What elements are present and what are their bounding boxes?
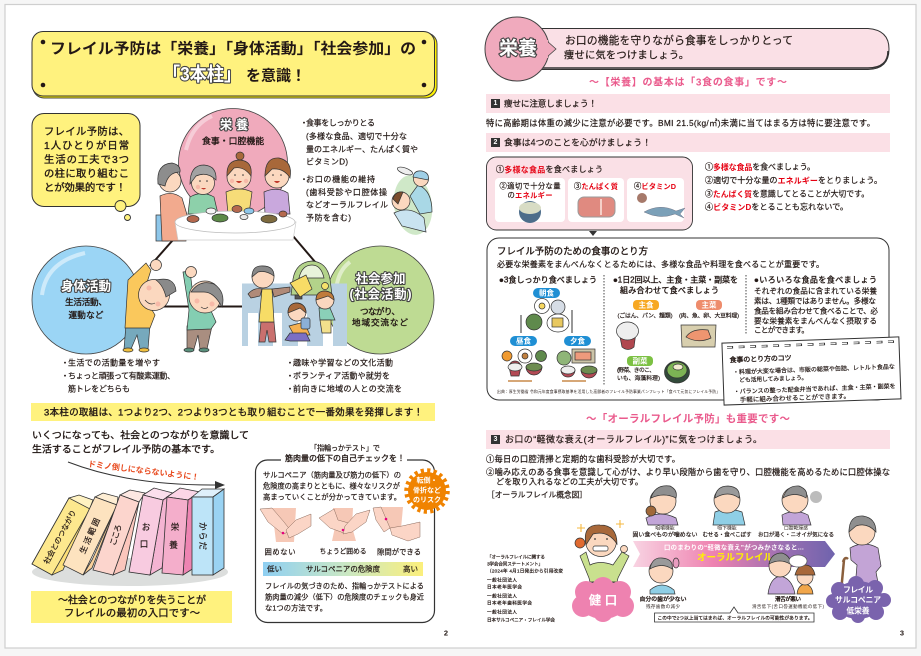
text: source statement: （2024年 4月1日発出から引用改変 xyxy=(487,568,563,574)
panel: how to eat: 素は、1種類ではありません。多様な xyxy=(754,296,876,306)
text: source statement xyxy=(487,554,563,624)
icon: risk starburst xyxy=(406,470,448,512)
circle: social participation: つながり、 xyxy=(360,306,400,316)
book: body xyxy=(192,489,224,575)
panel: ring finger test: 「指輪っかテスト」で xyxy=(310,444,380,452)
illustration: few teeth and poor articulation xyxy=(649,553,815,594)
text: BMI note: 特に高齢期は体重の減少に注意が必要です。BMI 21.5(kg/㎡)未満に当てはまる方は特に要注意です。 xyxy=(486,118,875,128)
panel: ring finger test: な1つの方法です。 xyxy=(265,604,327,612)
panel: ring finger test: 囲めない xyxy=(264,548,296,556)
tag: staple xyxy=(633,300,659,310)
text: four food points list: ④ビタミンDをとることも忘れないで。 xyxy=(705,202,848,212)
circle: nutrition xyxy=(178,108,288,218)
risk gradient bar xyxy=(263,562,423,576)
page number 3: 3 xyxy=(900,628,904,638)
text: nutrition bullets: (多様な食品、適切で十分な xyxy=(306,131,407,141)
text: social bullets: 前向きに地域の人との交流を xyxy=(293,384,402,394)
text: social bullets: ・ xyxy=(286,372,294,380)
panel: four food points: ①多様な食品を食べましょう xyxy=(496,164,603,174)
text: source statement: 日本サルコペニア・フレイル学会 xyxy=(487,616,555,624)
arrow: domino direction xyxy=(68,459,225,489)
title banner: を意識！ xyxy=(246,68,306,84)
book: social connection: 社会とのつながり xyxy=(41,508,78,566)
illustration: can't encircle xyxy=(260,508,311,542)
arrow: oral frailty xyxy=(633,541,835,567)
band 1: watch weight loss xyxy=(486,94,890,113)
text: lower captions: 自分の歯が少ない xyxy=(640,595,687,603)
illustration: healthy person xyxy=(575,520,629,590)
illustration: people eating at table xyxy=(156,152,296,241)
arrow: oral frailty: オーラルフレイル xyxy=(697,552,773,564)
text: nutrition bullets xyxy=(300,118,418,222)
illustration: people exercising xyxy=(123,260,223,352)
text: social connection intro: いくつになっても、社会とのつながりを意識して xyxy=(32,428,249,442)
text: activity bullets: ・ xyxy=(61,358,69,368)
book: mind xyxy=(93,490,145,575)
panel: meal tips note: ・料理が大変な場合は、市販の総菜や缶詰、レトルト食品な xyxy=(733,363,895,376)
panel: how to eat: 食品を組み合わせて食べることで、必 xyxy=(754,306,878,316)
card: energy xyxy=(495,178,565,223)
text: activity bullets xyxy=(61,358,175,394)
circle: social participation: (社会活動) xyxy=(350,286,412,302)
tag: main dish xyxy=(696,300,722,310)
burst: frailty sarcopenia malnutrition: サルコペニア xyxy=(835,596,881,604)
illustration: breakfast xyxy=(521,298,572,333)
text: oral care advice: ［オーラルフレイル概念図］ xyxy=(487,490,587,500)
tag: side dish xyxy=(627,356,653,366)
arrow: oral frailty: 口のまわりの“軽微な衰え”がつみかさなると… xyxy=(664,542,804,552)
card: energy: ②適切で十分な量 xyxy=(500,182,560,190)
panel: how to eat: (野菜、きのこ、 xyxy=(617,366,655,374)
note box: two or more applies xyxy=(654,607,814,622)
text: source statement: 日本老年医学会 xyxy=(487,584,522,590)
illustration: dinner xyxy=(557,349,597,381)
burst: frailty sarcopenia malnutrition xyxy=(826,576,891,623)
text: lower captions xyxy=(640,595,825,610)
text: oral decline captions: 咀嚼機能 xyxy=(655,524,675,532)
text: nutrition bullets: 予防を含む) xyxy=(306,212,351,222)
book: body: からだ xyxy=(198,522,208,550)
text: nutrition bullets: 食事をしっかりとる xyxy=(306,118,375,128)
note box: two or more applies: この中で2つ以上当てはまれば、オーラルフレイルの可能性があります。 xyxy=(658,614,812,622)
text: lower captions: 残存歯数の減少 xyxy=(646,603,680,610)
panel: how to eat: それぞれの食品に含まれている栄養 xyxy=(754,286,877,296)
icon: risk starburst: 転倒・ xyxy=(416,476,438,484)
band 3: oral frailty xyxy=(486,430,890,449)
icon: risk starburst: 骨折など xyxy=(413,486,441,494)
text: oral decline captions: 口腔乾燥感 xyxy=(784,524,808,532)
circle: social participation xyxy=(326,246,434,354)
cloud: healthy mouth: 健 口 xyxy=(589,592,617,608)
text: oral decline captions: むせる・食べこぼす xyxy=(702,532,752,538)
illustration: gap appears xyxy=(373,507,420,541)
text: nutrition bullets: ・ xyxy=(300,175,308,184)
triangle connecting lines xyxy=(150,232,316,306)
text: four food points list: ③たんぱく質を意識してとることが大切です。 xyxy=(705,188,869,198)
risk gradient bar: サルコペニアの危険度 xyxy=(306,564,381,574)
text: oral care advice xyxy=(486,454,890,500)
tag: side dish: 副菜 xyxy=(632,356,648,366)
illustration: domino books xyxy=(32,459,228,586)
title banner: 「3本柱」 xyxy=(163,64,241,86)
title banner: フレイル予防は「栄養」「身体活動」「社会参加」の xyxy=(50,40,416,58)
panel: how to eat: ●いろいろな食品を食べましょう xyxy=(754,276,877,284)
circle: physical activity xyxy=(32,246,140,354)
book: nutrition: 栄 xyxy=(171,522,180,532)
text: social bullets xyxy=(286,358,402,394)
illustration: grilled salmon xyxy=(681,325,716,347)
band 1: watch weight loss: 痩せに注意しましょう！ xyxy=(504,98,597,108)
illustration: lunch xyxy=(502,349,546,381)
cloud: healthy mouth xyxy=(572,577,634,622)
book: living range: 生活範囲 xyxy=(77,516,102,555)
band 2: four things for meals xyxy=(486,133,890,152)
book: mouth xyxy=(129,488,173,575)
card: vitamin D: ④ビタミンD xyxy=(634,182,676,190)
panel: how to eat xyxy=(487,238,889,400)
text: oral decline captions: お口が渇く・ニオイが気になる xyxy=(758,530,834,538)
illustration: dentist xyxy=(390,165,436,237)
tag: dinner: 夕食 xyxy=(570,336,585,346)
circle: nutrition: 栄 養 xyxy=(220,117,249,132)
risk gradient bar: 高い xyxy=(403,564,418,574)
circle: social participation: 社会参加 xyxy=(356,271,406,286)
book: nutrition xyxy=(162,488,200,575)
panel: ring finger test: フレイルの気づきのため、指輪っかテストによる xyxy=(265,582,424,590)
illustration: crosswalk with guard and children xyxy=(242,261,347,346)
text: social bullets: ・ xyxy=(286,384,294,394)
illustration: frail man xyxy=(841,516,882,604)
panel: meal tips note: ・バランスの整った配食弁当であれば、主食・主菜・副菜を xyxy=(734,382,896,396)
panel: meal tips note: 食事のとり方のコツ xyxy=(729,353,792,364)
heading: oral frailty prevention: 〜「オーラルフレイル予防」も重要です〜 xyxy=(586,412,790,425)
arrow: down triangle xyxy=(589,231,597,236)
band: first entry to frailty: 〜社会とのつながりを失うことが xyxy=(58,594,206,606)
panel: how to eat: ことができます。 xyxy=(754,324,809,334)
panel: how to eat: いも、海藻料理) xyxy=(617,374,660,382)
card: energy: のエネルギー xyxy=(508,190,552,200)
panel: meal tips note: 手軽に組み合わせることができます。 xyxy=(740,391,850,404)
band: three pillars message: 3本柱の取組は、1つより2つ、2つより3つとも取り組むことで一番効果を発揮します！ xyxy=(44,406,423,418)
text: nutrition bullets: (歯科受診や口腔体操 xyxy=(306,187,387,197)
panel: ring finger test xyxy=(256,444,448,622)
burst: frailty sarcopenia malnutrition: 低栄養 xyxy=(846,606,870,616)
band: first entry to frailty: フレイルの最初の入口です〜 xyxy=(64,606,200,620)
risk gradient bar: 低い xyxy=(267,564,282,574)
card: protein xyxy=(568,178,624,222)
text: nutrition bullets: ・ xyxy=(300,118,308,128)
header: nutrition: 痩せに気をつけましょう。 xyxy=(564,48,689,62)
burst: frailty sarcopenia malnutrition: フレイル xyxy=(843,586,873,594)
panel: how to eat: ●3食しっかり食べましょう xyxy=(499,276,597,284)
circle: nutrition: 食事・口腔機能 xyxy=(202,135,264,146)
circle: physical activity: 身体活動 xyxy=(61,278,111,294)
text: lower captions: 滑舌が悪い xyxy=(775,595,801,603)
panel: how to eat: 出典：厚生労働省 令和元年度食事摂取基準を活用した高齢者のフレイル予防事業パンフレット「食べて元気にフレイル予防」 xyxy=(497,389,720,394)
text: activity bullets: ちょっと頑張って有酸素運動、 xyxy=(68,370,175,380)
illustration: salad xyxy=(664,361,690,383)
panel: how to eat: 要な栄養素をまんべんなく摂取する xyxy=(754,316,877,326)
panel: ring finger test: ちょうど囲める xyxy=(320,548,366,556)
text: nutrition bullets: ビタミンD) xyxy=(306,158,348,166)
arrow: domino direction: ドミノ倒しにならないように！ xyxy=(87,459,200,482)
card: vitamin D xyxy=(627,178,685,222)
text: four food points list: ②適切で十分な量のエネルギーをとりましょう。 xyxy=(705,175,882,185)
panel: ring finger test: サルコペニア（筋肉量及び筋力の低下）の xyxy=(263,470,401,480)
header: nutrition: 栄養 xyxy=(499,38,537,60)
panel: ring finger test: 隙間ができる xyxy=(377,548,421,556)
panel: ring finger test: 筋肉量の減少（低下）の危険度のチェックも身近 xyxy=(265,592,424,602)
title banner xyxy=(32,32,437,98)
callout: thought bubble: の柱に取り組むこ xyxy=(44,167,129,180)
text: activity bullets: 生活での活動量を増やす xyxy=(68,358,160,368)
heading: three meals: 〜【栄養】の基本は「3食の食事」です〜 xyxy=(589,76,787,88)
text: social bullets: 趣味や学習などの文化活動 xyxy=(293,358,393,368)
panel: how to eat: ●1日2回以上、主食・主菜・副菜を xyxy=(613,274,738,284)
text: source statement: 一般社団法人 xyxy=(487,592,517,600)
text: social bullets: ボランティア活動や就労を xyxy=(293,370,390,380)
tag: lunch xyxy=(510,336,537,346)
text: four food points list xyxy=(705,162,882,212)
callout: thought bubble xyxy=(32,114,140,220)
text: nutrition bullets: 量のエネルギー、たんぱく質や xyxy=(306,144,418,154)
band 3: oral frailty: 3 xyxy=(494,436,498,443)
panel: how to eat: 組み合わせて食べましょう xyxy=(620,285,719,295)
text: nutrition bullets: などオーラルフレイル xyxy=(306,200,388,210)
panel: meal tips note: ども活用してみましょう。 xyxy=(739,374,807,384)
tag: dinner xyxy=(564,336,591,346)
band 2: four things for meals: 2 xyxy=(494,139,498,146)
text: activity bullets: 筋トレをどちらも xyxy=(68,384,130,394)
callout: thought bubble: 生活の工夫で3つ xyxy=(44,153,129,166)
book: mouth: お xyxy=(142,522,151,532)
text: oral decline captions: 固い食べものが噛めない xyxy=(632,530,698,538)
circle: physical activity: 運動など xyxy=(68,310,104,320)
text: source statement: 「オーラルフレイルに関する xyxy=(487,554,545,560)
icon: risk starburst: のリスク xyxy=(413,495,441,504)
band 1: watch weight loss: 1 xyxy=(494,100,498,107)
text: source statement: 日本老年歯科医学会 xyxy=(487,600,532,606)
panel: ring finger test: 筋肉量の低下の自己チェックを！ xyxy=(285,453,405,463)
panel: how to eat: 必要な栄養素をまんべんなくとるためには、多様な食品や料理を食べることが重要です。 xyxy=(497,259,824,269)
callout: thought bubble: とが効果的です！ xyxy=(44,181,126,194)
text: oral care advice: どを取り入れるなどの工夫が大切です。 xyxy=(496,476,643,486)
card: protein: ③たんぱく質 xyxy=(574,182,618,190)
illustration: three oral decline people xyxy=(646,486,822,525)
text: activity bullets: ・ xyxy=(61,372,69,380)
callout: thought bubble: 1人ひとりが日常 xyxy=(44,139,129,152)
panel: four food points xyxy=(486,157,692,230)
circle: social participation: 地域交流など xyxy=(352,316,408,328)
text: oral care advice: ①毎日の口腔清掃と定期的な歯科受診が大切です。 xyxy=(486,454,680,464)
text: nutrition bullets: お口の機能の維持 xyxy=(306,174,375,184)
panel: how to eat: (ごはん、パン、麺類) xyxy=(618,312,673,320)
panel: ring finger test: 高まっていくことが分かってきています。 xyxy=(263,492,401,502)
text: oral decline captions xyxy=(632,524,834,538)
illustration: rice bowl xyxy=(616,322,638,350)
text: social connection intro xyxy=(32,428,249,456)
text: oral care advice: ②噛み応えのある食事を意識して心がけ、より早い段階から歯を守り、口腔機能を高めるために口腔体操な xyxy=(486,467,890,477)
tag: staple: 主食 xyxy=(638,300,654,310)
tag: main dish: 主菜 xyxy=(702,300,717,310)
header: nutrition xyxy=(485,17,889,81)
tag: lunch: 昼食 xyxy=(516,336,531,346)
text: four food points list: ①多様な食品を食べましょう。 xyxy=(705,162,815,172)
book: mouth: 口 xyxy=(140,539,148,549)
text: source statement: 一般社団法人 xyxy=(487,608,517,616)
panel: how to eat: (肉、魚、卵、大豆料理) xyxy=(679,312,739,320)
book: nutrition: 養 xyxy=(169,540,178,550)
panel: how to eat: フレイル予防のための食事のとり方 xyxy=(497,246,648,256)
text: social bullets: ・ xyxy=(286,358,294,368)
book: living range xyxy=(63,493,118,575)
callout: thought bubble: フレイル予防は、 xyxy=(44,125,129,138)
book: social connection xyxy=(32,495,93,575)
book: mind: こころ xyxy=(108,523,124,547)
tag: breakfast xyxy=(533,288,560,298)
illustration: just encircle xyxy=(319,508,370,541)
text: oral decline captions: 嚥下機能 xyxy=(717,524,737,532)
page number 2: 2 xyxy=(444,628,448,638)
band: three pillars message xyxy=(31,403,435,421)
text: lower captions: 滑舌低下(舌口唇運動機能の低下) xyxy=(752,603,825,610)
circle: physical activity: 生活活動、 xyxy=(65,296,107,307)
text: source statement: 一般社団法人 xyxy=(487,576,517,584)
band: first entry to frailty xyxy=(31,591,232,623)
panel: meal tips note xyxy=(722,337,901,405)
header: nutrition: お口の機能を守りながら食事をしっかりとって xyxy=(565,34,793,47)
text: social connection intro: 生活することがフレイル予防の基本です。 xyxy=(32,442,220,456)
panel: ring finger test: 危険度の高まりとともに、様々なリスクが xyxy=(263,482,400,490)
band 2: four things for meals: 食事は4つのことを心がけましょう！ xyxy=(504,136,651,148)
text: source statement: 3学会合同ステートメント」 xyxy=(487,560,543,568)
band 3: oral frailty: お口の“軽微な衰え(オーラルフレイル)”に気をつけましょう。 xyxy=(505,434,762,444)
tag: breakfast: 朝食 xyxy=(539,288,554,298)
